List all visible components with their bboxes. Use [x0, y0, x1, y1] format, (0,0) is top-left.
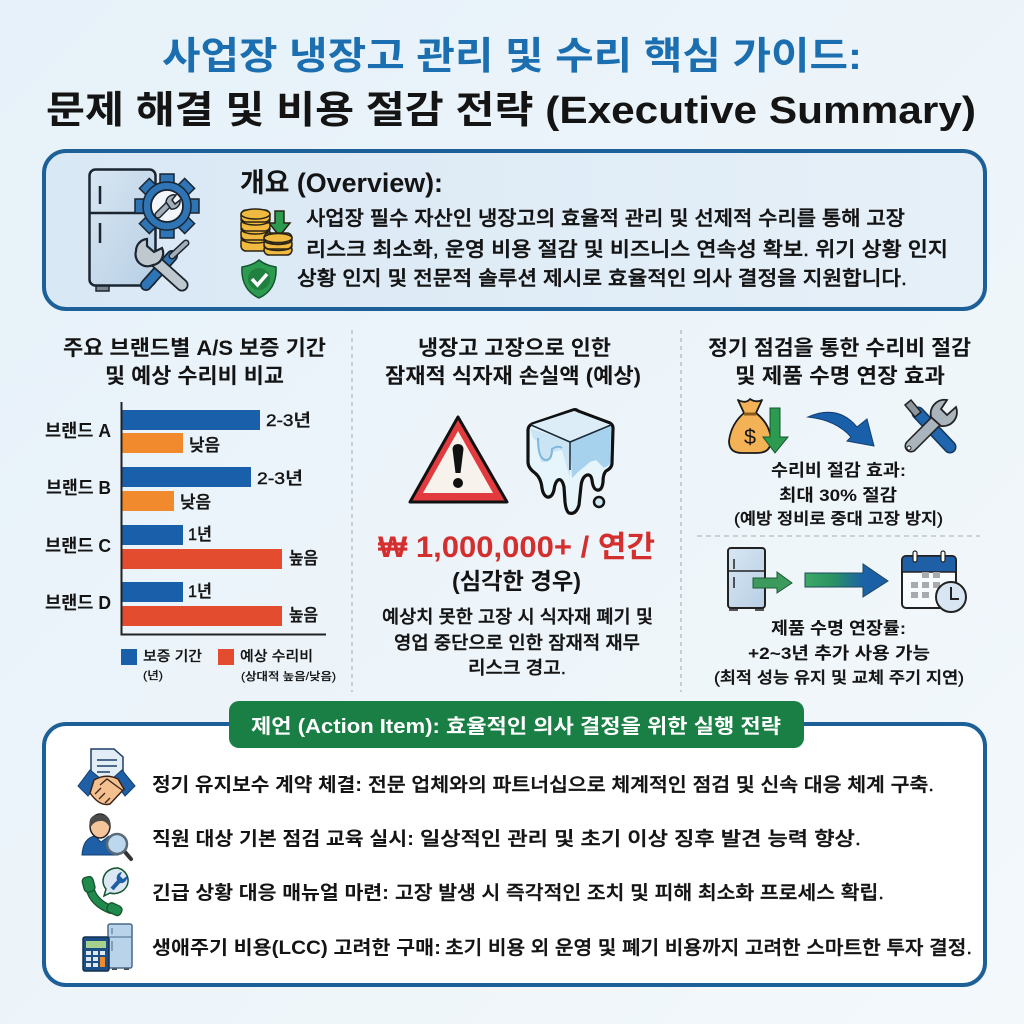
icon: refrigerator with gear and tools [90, 170, 199, 291]
icon: green shield with check [242, 260, 276, 298]
legend: (년) [143, 669, 163, 682]
icon: contract handshake [78, 749, 135, 805]
icon: money bag with down arrow: $ [744, 426, 756, 449]
icon: wrench and screwdriver [905, 400, 957, 450]
icon: refrigerator with arrow [728, 548, 792, 611]
text: staff training: 직원 대상 기본 점검 교육 실시: [152, 828, 414, 850]
text: life cycle cost purchase [152, 937, 972, 959]
panel: brand comparison [45, 337, 336, 683]
bar chart: 브랜드 C [45, 536, 111, 556]
risk text: 예상치 못한 고장 시 식자재 폐기 및 [382, 607, 653, 627]
icon: coins with down arrow [241, 209, 292, 255]
banner: action item heading: 제언 (Action Item): 효율적인 의사 결정을 위한 실행 전략 [251, 715, 781, 738]
heading: 냉장고 고장으로 인한 [418, 337, 611, 360]
bar chart: 2-3년 [257, 469, 303, 488]
legend: 예상 수리비 [240, 648, 313, 664]
risk text [382, 607, 653, 678]
repair cost savings text: 수리비 절감 효과: [771, 461, 906, 480]
lifespan extension text: 제품 수명 연장률: [771, 619, 906, 638]
text: maintenance contract: 전문 업체와의 파트너십으로 체계적인 점검 및 신속 대응 체계 구축. [368, 774, 934, 796]
title: 사업장 냉장고 관리 및 수리 핵심 가이드: [162, 36, 862, 78]
heading: 및 제품 수명 연장 효과 [735, 365, 945, 388]
title: 문제 해결 및 비용 절감 전략 (Executive Summary) [46, 90, 976, 132]
bar chart: 브랜드 D [45, 593, 111, 613]
loss amount: ₩ 1,000,000+ / 연간 [378, 531, 655, 564]
text: life cycle cost purchase: 초기 비용 외 운영 및 폐기 비용까지 고려한 스마트한 투자 결정. [445, 937, 972, 959]
text: emergency manual [152, 882, 884, 904]
heading: 정기 점검을 통한 수리비 절감 [708, 337, 971, 360]
text: staff training: 일상적인 관리 및 초기 이상 징후 발견 능력 향상. [420, 828, 861, 850]
bar chart [45, 402, 326, 634]
overview text: 사업장 필수 자산인 냉장고의 효율적 관리 및 선제적 수리를 통해 고장 [306, 207, 905, 230]
bar chart: 브랜드 B [46, 478, 111, 498]
risk text: 영업 중단으로 인한 잠재적 재무 [394, 633, 640, 653]
legend: 보증 기간 [143, 648, 202, 664]
overview text: 상황 인지 및 전문적 솔루션 제시로 효율적인 의사 결정을 지원합니다. [297, 267, 907, 290]
heading: 주요 브랜드별 A/S 보증 기간 [63, 337, 326, 360]
repair cost savings text: 최대 30% 절감 [779, 486, 897, 505]
heading [63, 337, 326, 388]
overview text [297, 207, 948, 290]
legend: (상대적 높음/낮음) [241, 669, 336, 683]
bar chart: 높음 [289, 549, 318, 568]
icon: melting ice cube [528, 410, 613, 513]
text: staff training [152, 828, 861, 850]
lifespan extension text: +2~3년 추가 사용 가능 [748, 644, 930, 663]
repair cost savings text: (예방 정비로 중대 고장 방지) [734, 510, 943, 528]
bar chart: 낮음 [189, 436, 220, 455]
panel: action items [44, 701, 985, 985]
lifespan extension text [714, 619, 964, 687]
panel: food loss [378, 337, 655, 678]
icon: calendar with clock [902, 551, 966, 612]
heading: 잠재적 식자재 손실액 (예상) [385, 365, 641, 388]
icon: phone with wrench bubble [81, 868, 128, 917]
text: maintenance contract [152, 774, 934, 796]
icon: calculator and refrigerator [83, 924, 132, 971]
text: emergency manual: 긴급 상황 대응 매뉴얼 마련: [152, 882, 389, 904]
text: emergency manual: 고장 발생 시 즉각적인 조치 및 피해 최소화 프로세스 확립. [395, 882, 884, 904]
text: maintenance contract: 정기 유지보수 계약 체결: [152, 774, 362, 796]
bar chart: 낮음 [180, 493, 211, 512]
bar chart: 1년 [188, 525, 212, 544]
overview text: 리스크 최소화, 운영 비용 절감 및 비즈니스 연속성 확보. 위기 상황 인지 [306, 238, 948, 261]
title [46, 36, 976, 132]
severity note: (심각한 경우) [452, 568, 581, 594]
lifespan extension text: (최적 성능 유지 및 교체 주기 지연) [714, 669, 964, 687]
icon: money bag with down arrow [729, 399, 788, 453]
arrow: curved blue [808, 412, 874, 446]
bar chart: 1년 [188, 582, 212, 601]
legend [121, 648, 336, 683]
text: life cycle cost purchase: 생애주기 비용(LCC) 고려한 구매: [152, 937, 441, 959]
banner: action item heading [229, 701, 804, 748]
panel: inspection benefits [697, 337, 980, 687]
heading: overview: 개요 (Overview): [240, 168, 443, 198]
icon: person with magnifier [82, 814, 131, 859]
heading: 및 예상 수리비 비교 [105, 365, 284, 388]
arrow: gradient green to blue [805, 564, 888, 597]
panel: overview [44, 151, 985, 309]
bar chart: 2-3년 [266, 411, 311, 430]
repair cost savings text [734, 461, 943, 528]
icon: warning triangle [410, 417, 507, 502]
bar chart: 브랜드 A [45, 421, 111, 441]
heading [385, 337, 641, 388]
heading [708, 337, 971, 388]
bar chart: 높음 [289, 606, 318, 625]
risk text: 리스크 경고. [468, 658, 566, 678]
